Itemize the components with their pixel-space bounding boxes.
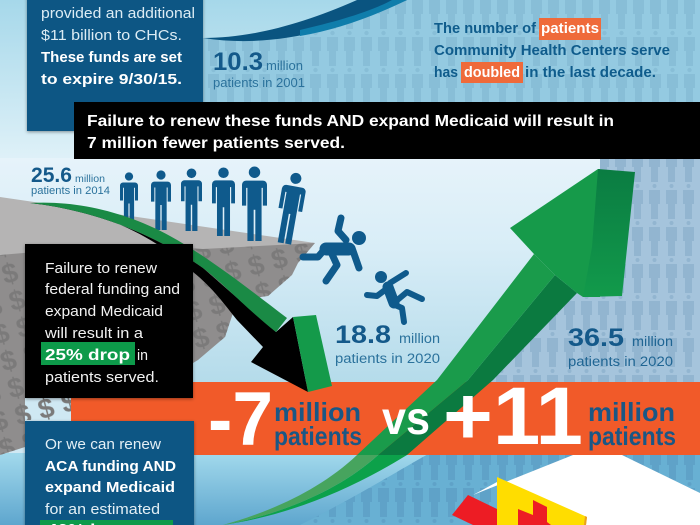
arrow shaft green xyxy=(30,203,287,332)
stat: 10.3 million patients in 2001: patients in 2001 xyxy=(213,76,305,90)
falling person 1 xyxy=(303,218,366,281)
black banner: 7 million fewer patients served. xyxy=(87,135,345,152)
stat: 36.5 million patients in 2020: patients in 2020 xyxy=(568,354,673,369)
blue panel: renew funding: ACA funding AND xyxy=(45,459,176,475)
stat: 18.8 million patients in 2020: 18.8 xyxy=(335,321,391,349)
callout: patients doubled xyxy=(434,18,670,83)
rising green arrow xyxy=(223,169,635,525)
arrow tail lower strip xyxy=(223,455,407,525)
comparison: plus 11 million xyxy=(443,371,676,462)
black panel: failure: will result in a xyxy=(44,326,144,342)
highlight: patients xyxy=(539,18,601,40)
highlight: increase xyxy=(40,520,173,525)
blue panel: funding: provided an additional xyxy=(41,6,195,22)
blue panel: funding: These funds are set xyxy=(41,50,182,66)
red roof edge xyxy=(452,495,497,525)
black banner xyxy=(74,102,700,159)
highlight: doubled xyxy=(461,62,523,83)
stat: 25.6 million patients in 2014: patients in 2014 xyxy=(31,185,110,197)
black panel: failure: Failure to renew xyxy=(45,261,158,277)
blue panel: funding: to expire 9/30/15. xyxy=(41,72,182,88)
blue panel: funding xyxy=(27,0,203,131)
background: lower sky xyxy=(0,453,700,525)
black panel: failure: federal funding and xyxy=(45,282,180,298)
falling person 2 xyxy=(367,271,422,322)
yellow sign xyxy=(497,477,587,525)
highlight: 25% drop xyxy=(41,342,135,365)
black banner: Failure to renew these funds AND expand Medicaid will result in xyxy=(87,113,614,130)
callout: patients doubled: Community Health Centers serve xyxy=(434,43,670,59)
arrow shaft black xyxy=(30,203,308,392)
blue panel: renew funding: for an estimated xyxy=(45,502,160,518)
black panel: failure: expand Medicaid xyxy=(45,304,163,320)
stat: 25.6 million patients in 2014: 25.6 xyxy=(31,164,72,187)
health center building icon xyxy=(452,455,700,525)
callout: patients doubled: The number of xyxy=(434,21,536,37)
people pattern: right panel xyxy=(470,158,700,384)
comparison: plus 11 million: +11 xyxy=(443,371,583,462)
callout: patients doubled: has xyxy=(434,65,458,81)
cliff top surface xyxy=(0,197,315,255)
black panel: failure xyxy=(25,244,193,398)
blue panel: renew funding xyxy=(25,421,194,525)
comparison: minus 7 million: -7 xyxy=(208,377,273,462)
highlight: patients: patients xyxy=(541,21,599,37)
arrow shaft dark side xyxy=(378,275,577,455)
stat: 18.8 million patients in 2020: million xyxy=(399,331,440,346)
comparison: minus 7 million xyxy=(208,377,362,462)
stat: 25.6 million patients in 2014 xyxy=(31,164,110,197)
arrow head green face xyxy=(293,315,332,392)
yellow sign edge xyxy=(584,516,587,525)
red cross xyxy=(518,500,551,525)
stat: 10.3 million patients in 2001 xyxy=(213,48,305,90)
stat: 36.5 million patients in 2020: 36.5 xyxy=(568,324,624,352)
callout: patients doubled: in the last decade. xyxy=(525,65,656,81)
people pattern: top panel xyxy=(203,0,700,103)
background: middle sky xyxy=(0,158,700,384)
people standing on cliff xyxy=(120,167,309,246)
stat: 18.8 million patients in 2020 xyxy=(335,321,440,366)
stat: 10.3 million patients in 2001: million xyxy=(266,59,303,73)
highlight: 25% drop: 25% drop xyxy=(45,347,130,364)
arrow shaft light side xyxy=(357,254,555,455)
comparison: vs: vs xyxy=(382,392,430,444)
people pattern: lower panel xyxy=(300,453,700,525)
cliff rock face xyxy=(0,225,315,455)
stat: 18.8 million patients in 2020: patients in 2020 xyxy=(335,351,440,366)
stat: 36.5 million patients in 2020: million xyxy=(632,334,673,349)
falling arrow xyxy=(30,203,332,392)
building roof xyxy=(473,455,700,525)
stat: 25.6 million patients in 2014: million xyxy=(75,173,105,185)
blue panel: funding: $11 billion to CHCs. xyxy=(41,28,182,44)
comparison: plus 11 million: million xyxy=(588,397,675,427)
blue panel: renew funding: Or we can renew xyxy=(45,437,162,453)
highlight: doubled: doubled xyxy=(464,65,520,81)
arrow head xyxy=(510,169,600,297)
arrow head side face xyxy=(583,169,635,297)
orange comparison band xyxy=(71,382,700,455)
black panel: failure: patients served. xyxy=(45,370,159,386)
comparison: minus 7 million: patients xyxy=(274,421,362,451)
cliff xyxy=(0,197,315,455)
background: top sky xyxy=(0,0,700,160)
comparison: plus 11 million: patients xyxy=(588,421,676,451)
stat: 36.5 million patients in 2020 xyxy=(568,324,673,369)
comparison: minus 7 million: million xyxy=(274,397,361,427)
arrow tail upper strip xyxy=(223,455,378,525)
blue panel: renew funding: expand Medicaid xyxy=(45,480,175,496)
blue growth curve xyxy=(203,0,407,41)
black panel: failure: in xyxy=(137,348,148,364)
stat: 10.3 million patients in 2001: 10.3 xyxy=(213,48,263,76)
